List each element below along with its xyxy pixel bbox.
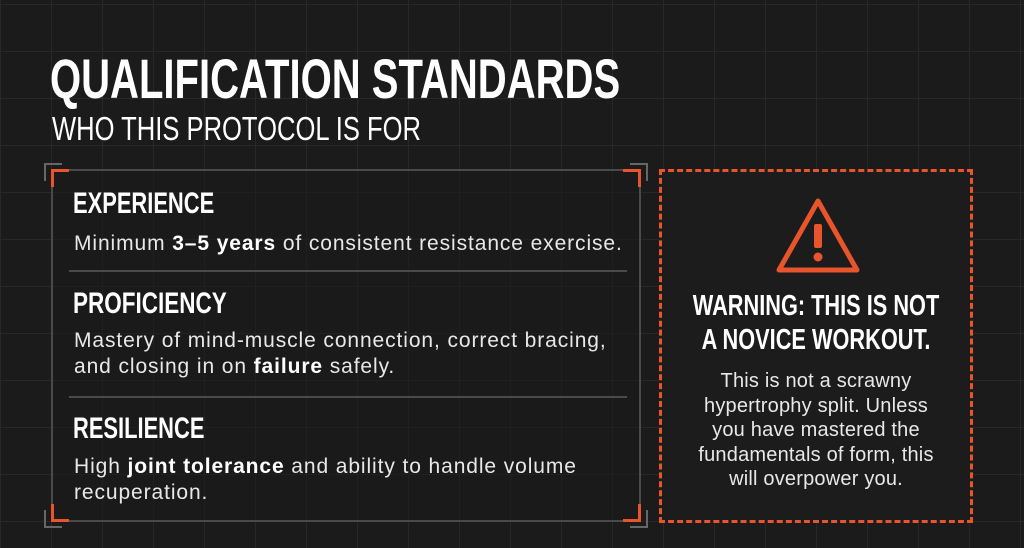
subtitle: WHO THIS PROTOCOL IS FOR bbox=[52, 110, 421, 147]
title: QUALIFICATION STANDARDS bbox=[50, 47, 620, 110]
text: resilience: High joint tolerance and ability to handle volume bbox=[74, 455, 577, 478]
warning text: you have mastered the bbox=[712, 419, 920, 441]
text: resilience: recuperation. bbox=[74, 480, 208, 504]
panel: warning bbox=[659, 169, 973, 523]
warning heading: A NOVICE WORKOUT. bbox=[702, 324, 930, 356]
heading: experience: EXPERIENCE bbox=[73, 187, 214, 220]
icon: warning triangle bbox=[776, 198, 860, 272]
text: resilience bbox=[74, 455, 577, 504]
warning text bbox=[698, 370, 934, 490]
warning heading bbox=[692, 290, 940, 356]
warning text: will overpower you. bbox=[729, 468, 903, 490]
warning text: This is not a scrawny bbox=[721, 370, 911, 392]
panel: qualifications bbox=[51, 169, 641, 522]
text: experience: Minimum 3–5 years of consistent resistance exercise. bbox=[74, 232, 623, 255]
text: proficiency bbox=[74, 329, 607, 378]
warning heading: WARNING: THIS IS NOT bbox=[693, 290, 939, 322]
heading: resilience: RESILIENCE bbox=[73, 412, 204, 445]
warning text: hypertrophy split. Unless bbox=[704, 394, 928, 416]
warning text: fundamentals of form, this bbox=[698, 444, 934, 466]
heading: proficiency: PROFICIENCY bbox=[73, 287, 227, 320]
corner brackets bbox=[44, 163, 648, 528]
text: proficiency: Mastery of mind-muscle connection, correct bracing, bbox=[74, 329, 607, 352]
text: proficiency: and closing in on failure safely. bbox=[74, 354, 395, 378]
